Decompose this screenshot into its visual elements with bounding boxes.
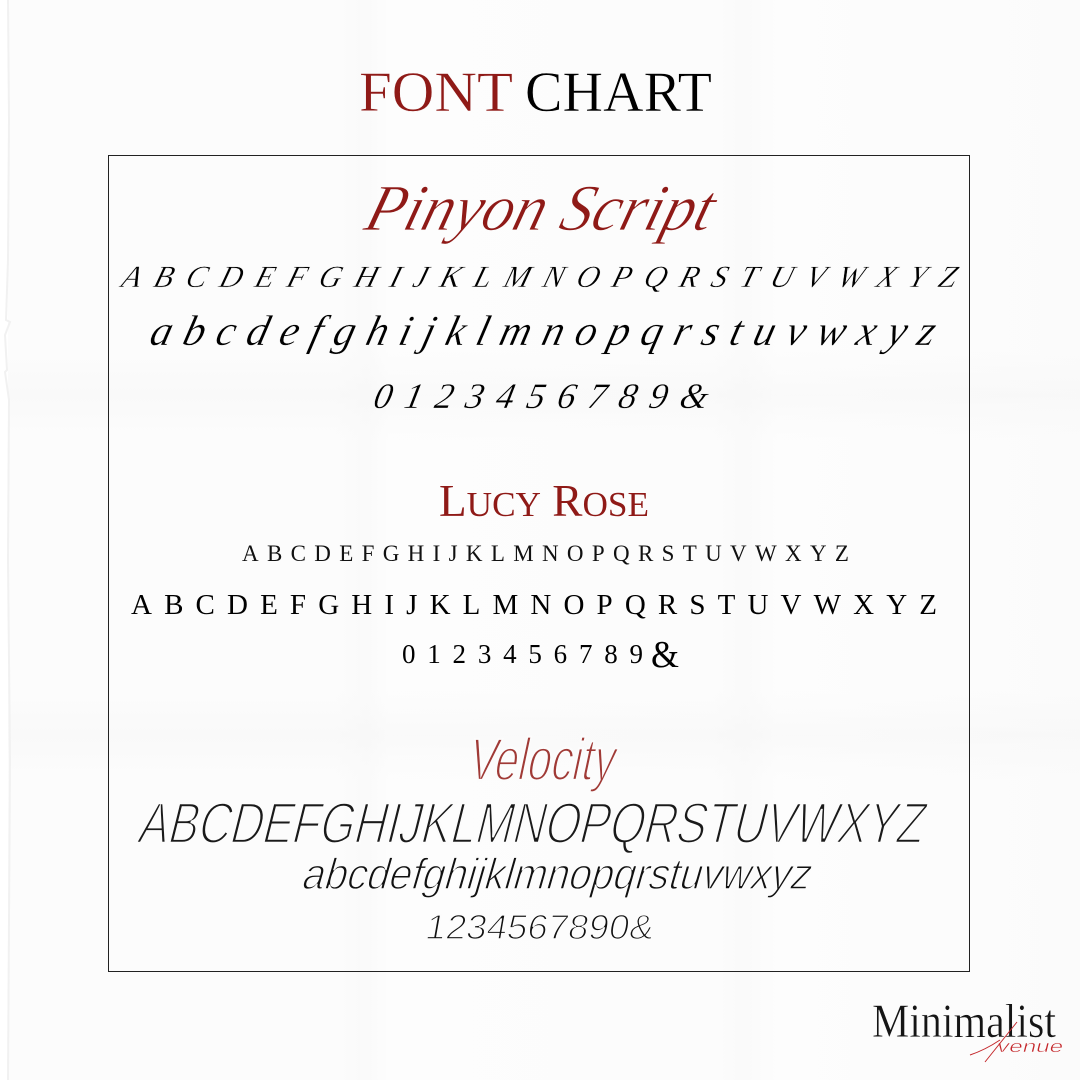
heading: Pinyon Script: Pinyon Script — [357, 171, 727, 245]
title: FONT — [359, 61, 513, 124]
capitals alphabet: ABCDEFGHIJKLMNOPQRSTUVWXYZ — [131, 589, 937, 621]
section: Velocity — [133, 726, 934, 947]
title: CHART — [525, 61, 712, 124]
numerals: 0123456789 — [402, 639, 643, 669]
ampersand: & — [651, 634, 679, 676]
numerals: 0123456789& — [370, 376, 713, 416]
heading: Velocity: Velocity — [463, 726, 624, 793]
heading: Lucy Rose: LUCY ROSE — [439, 476, 649, 526]
panel: font chart frame — [108, 156, 970, 972]
lowercase alphabet: abcdefghijklmnopqrstuvwxyz — [297, 849, 820, 899]
section: Pinyon Script — [116, 171, 962, 416]
numerals: 1234567890& — [423, 908, 657, 947]
lowercase alphabet: abcdefghijklmnopqrstuvwxyz — [146, 308, 941, 355]
uppercase alphabet: ABCDEFGHIJKLMNOPQRSTUVWXYZ — [116, 260, 962, 294]
small capitals alphabet: ABCDEFGHIJKLMNOPQRSTUVWXYZ — [242, 541, 849, 566]
section: Lucy Rose — [131, 476, 937, 676]
logo: Minimalist Avenue: venue — [995, 1036, 1066, 1056]
title — [359, 61, 712, 124]
logo: Minimalist Avenue: Minimalist — [872, 995, 1057, 1048]
